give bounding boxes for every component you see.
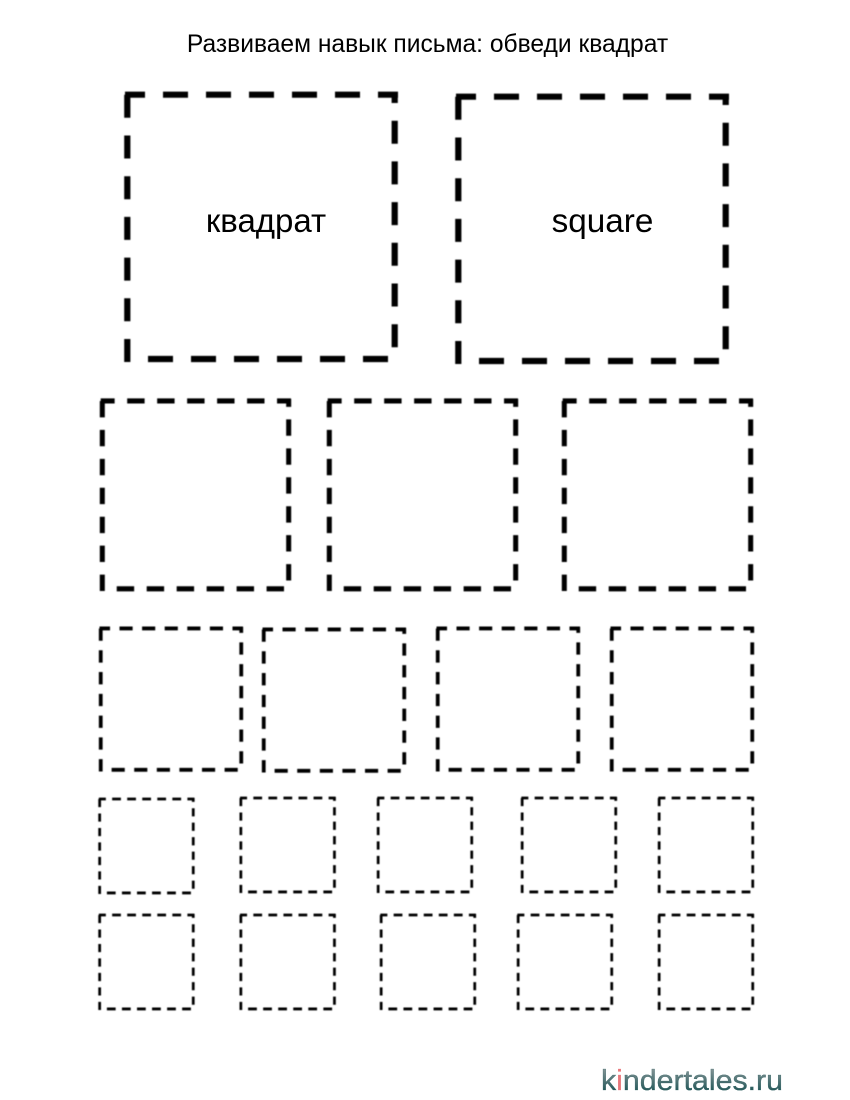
large dashed square: square: square: [552, 203, 653, 240]
large dashed square: квадрат: квадрат: [206, 202, 326, 239]
row 3: four dashed squares: [100, 627, 754, 772]
row 5: five small dashed squares: [99, 914, 754, 1010]
logo: kindertales.ru: kindertales.ru: [601, 1065, 783, 1097]
large dashed square: square: [456, 94, 729, 364]
row 2: three medium dashed squares: [101, 399, 753, 591]
title: Развиваем навык письма: обведи квадрат: [187, 31, 668, 58]
row 4: five small dashed squares: [99, 797, 754, 894]
large dashed square: квадрат: [125, 92, 398, 362]
